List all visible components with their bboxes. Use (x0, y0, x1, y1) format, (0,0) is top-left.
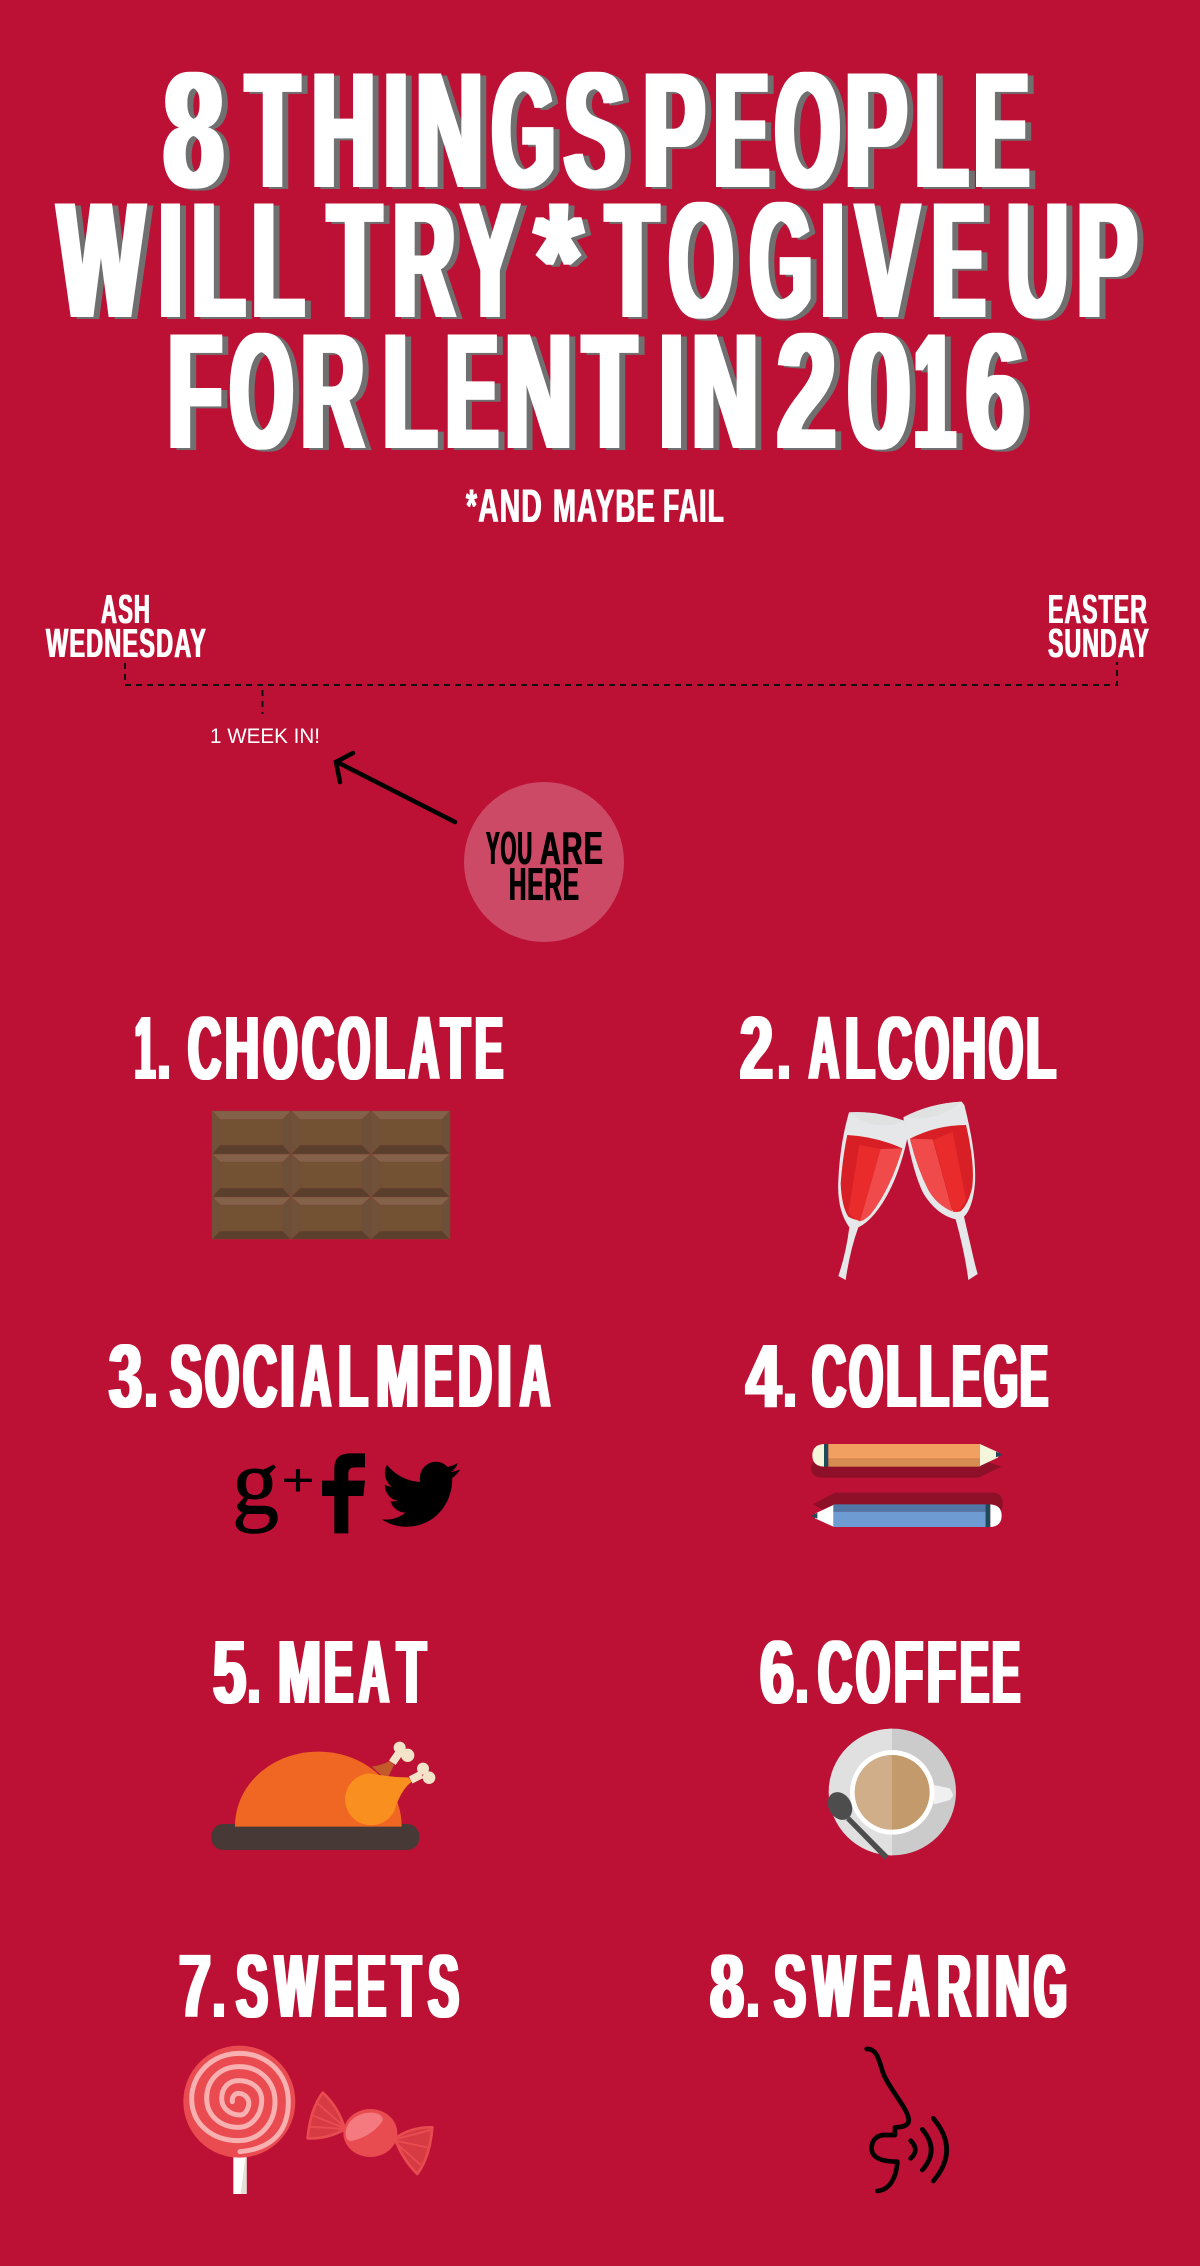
title: I (821, 168, 844, 352)
label: easter sunday (1048, 586, 1150, 666)
heading: coffee: 6 (760, 1623, 794, 1723)
heading: social media: E (424, 1327, 453, 1427)
heading: meat: . (248, 1623, 260, 1723)
title: I (384, 38, 408, 222)
heading: college (746, 1327, 1048, 1427)
title: 6 (966, 299, 1024, 483)
heading: meat: M (278, 1623, 321, 1723)
icon: social media logos (232, 1431, 460, 1534)
title: V (856, 168, 919, 352)
icon: speaking face (867, 2049, 947, 2191)
heading: alcohol: L (845, 999, 875, 1099)
heading: swearing: S (774, 1937, 806, 2037)
title: I (660, 299, 683, 483)
heading: chocolate: T (441, 999, 470, 1099)
title: O (669, 168, 733, 352)
heading: meat: 5 (213, 1623, 246, 1723)
title: N (505, 299, 572, 483)
twitter (382, 1462, 460, 1527)
title: P (643, 38, 705, 222)
text: G (1034, 1937, 1067, 2037)
title: E (932, 168, 985, 352)
title: F (168, 299, 222, 483)
title: T (606, 168, 658, 352)
heading: college: L (919, 1327, 949, 1427)
heading: swearing: . (747, 1937, 759, 2037)
heading: swearing: N (995, 1937, 1030, 2037)
facebook (322, 1453, 365, 1533)
title: E (446, 299, 498, 483)
heading: alcohol: 2 (740, 999, 773, 1099)
heading: alcohol: . (778, 999, 790, 1099)
title: W (58, 168, 144, 352)
google plus: + (281, 1454, 315, 1507)
heading: chocolate (135, 999, 503, 1099)
heading: social media: I (280, 1327, 295, 1427)
google plus: g (232, 1431, 279, 1534)
title: R (393, 168, 455, 352)
heading: coffee: . (796, 1623, 808, 1723)
title: T (583, 299, 636, 483)
heading: college: . (784, 1327, 796, 1427)
icon: chocolate bar (212, 1111, 450, 1239)
icon: pencils (811, 1444, 1003, 1527)
heading: alcohol: C (878, 999, 912, 1099)
title: T (328, 168, 381, 352)
heading: chocolate: L (374, 999, 404, 1099)
right glass (903, 1102, 978, 1280)
heading: coffee: E (960, 1623, 989, 1723)
heading: alcohol: H (952, 999, 986, 1099)
title: H (312, 38, 375, 222)
icon: roast turkey (211, 1742, 435, 1850)
heading: college: L (886, 1327, 916, 1427)
title: G (750, 168, 812, 352)
title: * (535, 168, 583, 352)
title: L (383, 299, 437, 483)
heading: meat (213, 1623, 426, 1723)
heading: social media: S (170, 1327, 202, 1427)
heading: sweets: E (324, 1937, 353, 2037)
heading: coffee: F (894, 1623, 923, 1723)
heading: chocolate: A (409, 999, 439, 1099)
subtitle: *AND (466, 479, 543, 532)
heading: social media: A (301, 1327, 331, 1427)
heading: social media: . (145, 1327, 157, 1427)
heading: chocolate: . (158, 999, 170, 1099)
title: L (915, 38, 968, 222)
title: 1 (914, 299, 955, 483)
heading: swearing: A (899, 1937, 929, 2037)
heading: chocolate: C (302, 999, 334, 1099)
heading: meat: E (324, 1623, 353, 1723)
you are here badge: ARE (540, 822, 604, 874)
label: one week in: 1 WEEK IN! (210, 725, 320, 748)
subtitle: FAIL (663, 479, 725, 532)
wrapped candy (308, 2093, 432, 2174)
heading: chocolate: H (225, 999, 259, 1099)
title: Y (461, 168, 519, 352)
heading: swearing: E (863, 1937, 892, 2037)
title: R (301, 299, 364, 483)
heading: alcohol: O (989, 999, 1023, 1099)
heading: alcohol: O (915, 999, 949, 1099)
heading: chocolate: 1 (135, 999, 155, 1099)
heading: social media (109, 1327, 550, 1427)
heading: alcohol: A (809, 999, 839, 1099)
heading: meat: A (359, 1623, 389, 1723)
heading: social media: 3 (109, 1327, 142, 1427)
heading: chocolate: C (188, 999, 221, 1099)
title (58, 38, 1137, 483)
subtitle (466, 479, 725, 532)
title: L (252, 168, 304, 352)
heading: alcohol: L (1026, 999, 1056, 1099)
title: 2 (777, 299, 836, 483)
timeline (125, 662, 1117, 714)
heading: college: E (952, 1327, 981, 1427)
heading: sweets: S (428, 1937, 459, 2037)
heading: sweets (179, 1937, 459, 2037)
heading: chocolate: O (338, 999, 370, 1099)
heading: sweets: E (357, 1937, 386, 2037)
heading: social media: I (497, 1327, 512, 1427)
title: O (230, 299, 293, 483)
title: I (159, 168, 182, 352)
arrow (336, 753, 455, 822)
heading: social media: L (338, 1327, 368, 1427)
title: P (845, 38, 907, 222)
heading: coffee: O (856, 1623, 890, 1723)
heading: college: 4 (746, 1327, 781, 1427)
heading: sweets: . (213, 1937, 225, 2037)
title: L (192, 168, 245, 352)
text: E (992, 1623, 1020, 1723)
heading: sweets: S (236, 1937, 268, 2037)
icon: coffee cup (823, 1729, 956, 1860)
heading: social media: D (458, 1327, 492, 1427)
heading: swearing (710, 1937, 1067, 2037)
title: 0 (847, 299, 911, 483)
subtitle: MAYBE (553, 479, 656, 532)
heading: sweets: T (392, 1937, 421, 2037)
heading: alcohol (740, 999, 1056, 1099)
heading: sweets: 7 (179, 1937, 211, 2037)
title: E (714, 38, 769, 222)
heading: swearing: W (813, 1937, 855, 2037)
label: ash wednesday (46, 586, 207, 666)
heading: coffee (760, 1623, 1020, 1723)
title: P (1077, 168, 1137, 352)
heading: coffee: F (927, 1623, 956, 1723)
title: E (974, 38, 1029, 222)
title: 8 (164, 38, 224, 222)
heading: college: G (984, 1327, 1018, 1427)
you are here badge: HERE (509, 858, 580, 910)
heading: chocolate: O (264, 999, 298, 1099)
heading: swearing: 8 (710, 1937, 744, 2037)
title: O (775, 38, 840, 222)
text: E (1020, 1327, 1048, 1427)
heading: swearing: I (975, 1937, 990, 2037)
label: ash wednesday: ASH (101, 586, 151, 632)
heading: meat: T (397, 1623, 426, 1723)
title: G (492, 38, 555, 222)
heading: college: O (849, 1327, 883, 1427)
heading: social media: M (376, 1327, 419, 1427)
left glass (838, 1112, 907, 1280)
heading: sweets: W (275, 1937, 317, 2037)
icon: wine glasses (838, 1102, 978, 1280)
google plus (232, 1431, 315, 1534)
title: S (564, 38, 625, 222)
title: N (416, 38, 483, 222)
title: U (1007, 168, 1068, 352)
label: ash wednesday: WEDNESDAY (46, 620, 207, 666)
heading: coffee: C (818, 1623, 852, 1723)
text: A (520, 1327, 550, 1427)
heading: social media: C (243, 1327, 277, 1427)
you are here badge (464, 782, 624, 942)
heading: swearing: R (937, 1937, 971, 2037)
title: N (692, 299, 758, 483)
icon: lollipop and candy (183, 2046, 432, 2194)
you are here badge: YOU (486, 822, 533, 874)
heading: social media: O (205, 1327, 239, 1427)
heading: college: C (812, 1327, 846, 1427)
lollipop (183, 2046, 295, 2194)
text: E (475, 999, 503, 1099)
title: T (246, 38, 299, 222)
